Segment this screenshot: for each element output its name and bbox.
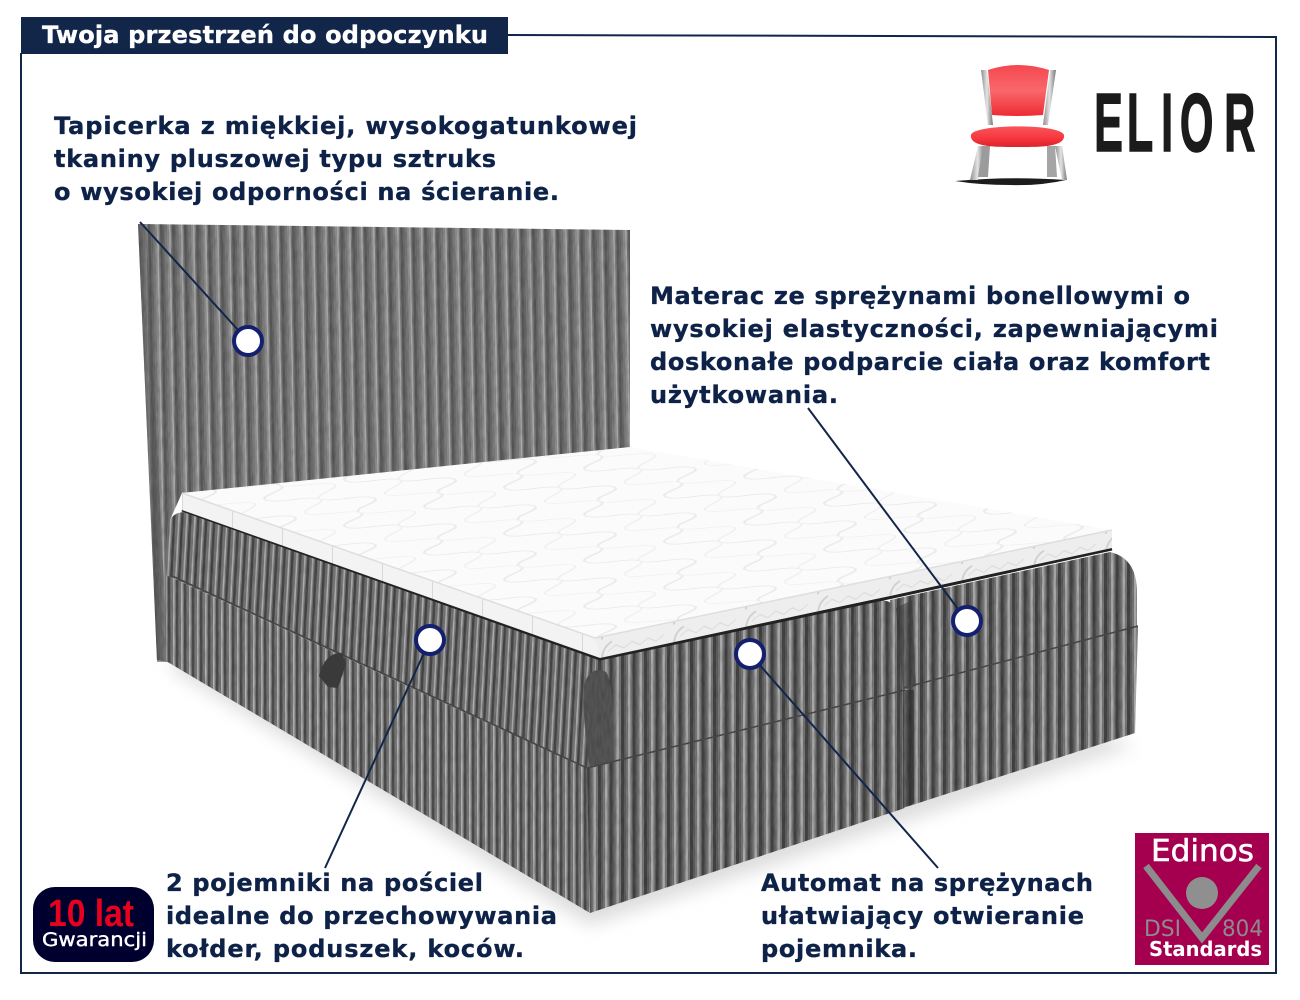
floor shadow (170, 650, 1135, 925)
storage handle (319, 653, 346, 688)
text block: mattress: wysokiej elastyczności, zapewniającymi (650, 315, 1218, 343)
text block: lift mechanism (761, 869, 1093, 963)
badge: Edinos standards: Edinos (1151, 834, 1254, 869)
title banner (21, 17, 508, 54)
text block: storage: idealne do przechowywania (166, 902, 557, 930)
bed base (166, 512, 1138, 913)
text block: upholstery (54, 112, 637, 206)
text block: upholstery: tkaniny pluszowej typu sztruks (54, 145, 496, 173)
title banner: Twoja przestrzeń do odpoczynku (42, 21, 488, 49)
marker: storage (416, 626, 444, 654)
wordmark: ELIOR (1094, 77, 1255, 170)
text block: storage (166, 869, 557, 963)
text block: lift mechanism: ułatwiający otwieranie (761, 902, 1084, 930)
badge: Edinos standards: 804 (1222, 917, 1263, 942)
callout line: mattress (808, 408, 967, 621)
badge: 10 year warranty: 10 lat (48, 893, 134, 935)
callout line: storage (325, 640, 430, 868)
text block: storage: 2 pojemniki na pościel (166, 869, 483, 897)
badge: 10 year warranty (33, 887, 154, 962)
headboard (138, 224, 630, 662)
marker: lift mechanism (736, 640, 764, 668)
callout line: lift mechanism (750, 654, 938, 868)
text block: mattress (650, 282, 1218, 409)
text block: mattress: Materac ze sprężynami bonellowymi o (650, 282, 1190, 310)
bed illustration (138, 224, 1138, 913)
text block: storage: kołder, poduszek, koców. (166, 935, 524, 963)
badge: Edinos standards: DSI (1144, 917, 1181, 942)
text block: lift mechanism: Automat na sprężynach (761, 869, 1093, 897)
badge: Edinos standards (1135, 833, 1269, 965)
badge: 10 year warranty: Gwarancji (42, 929, 147, 951)
icon: red chair (955, 65, 1067, 185)
text block: mattress: doskonałe podparcie ciała oraz komfort (650, 348, 1210, 376)
logo: Elior chair and wordmark (955, 65, 1255, 185)
text block: lift mechanism: pojemnika. (761, 935, 917, 963)
text block: mattress: użytkowania. (650, 381, 838, 409)
marker: mattress (953, 607, 981, 635)
callout line: fabric (140, 222, 248, 341)
text block: upholstery: Tapicerka z miękkiej, wysokogatunkowej (54, 112, 637, 140)
mattress topper (182, 447, 1112, 659)
text block: upholstery: o wysokiej odporności na ścieranie. (54, 178, 559, 206)
marker: fabric (234, 327, 262, 355)
badge: Edinos standards: Standards (1149, 937, 1262, 961)
